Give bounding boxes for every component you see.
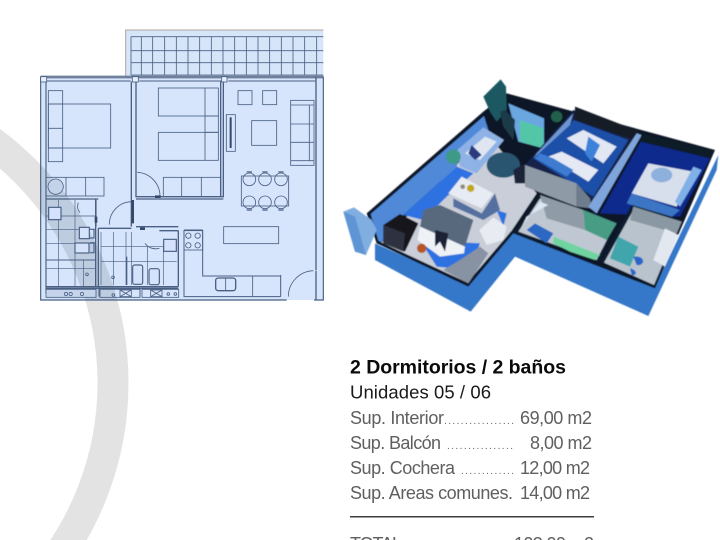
bedroom 2 furniture bbox=[137, 88, 221, 197]
dining table bbox=[241, 172, 289, 210]
divider rule bbox=[350, 516, 594, 518]
area list: ................. bbox=[444, 416, 514, 427]
sofa bbox=[457, 127, 504, 173]
bedroom block bbox=[525, 110, 635, 207]
dining table bbox=[448, 177, 493, 208]
floor slab bbox=[367, 93, 715, 288]
second bath bbox=[600, 205, 683, 287]
doors bbox=[78, 197, 313, 297]
heading: 2 Dormitorios / 2 baños bbox=[350, 356, 566, 378]
bedroom front wall bbox=[525, 165, 577, 207]
living floor bbox=[382, 133, 537, 283]
area list: Sup. Balcón bbox=[350, 433, 441, 453]
balcony bbox=[505, 93, 570, 148]
floor plan bbox=[41, 30, 323, 300]
units: Unidades 05 / 06 bbox=[350, 382, 491, 402]
bathroom 2 bbox=[101, 232, 177, 285]
area list: ................ bbox=[447, 441, 513, 452]
area list: 12,00 m2 bbox=[520, 458, 590, 478]
service strip bbox=[46, 289, 179, 297]
bathroom 1 bbox=[47, 200, 96, 287]
corridor and lower bath wall bbox=[513, 193, 618, 262]
twin beds bbox=[567, 130, 617, 163]
area list: 69,00 m2 bbox=[520, 408, 592, 428]
living room furniture bbox=[226, 91, 314, 165]
kitchen island bbox=[420, 205, 473, 247]
bedroom 1 furniture bbox=[46, 91, 111, 196]
interior walls bbox=[46, 82, 281, 297]
black fridge block bbox=[383, 214, 418, 252]
coffee table and rug bbox=[487, 152, 520, 178]
floor plan base fill bbox=[41, 30, 323, 300]
living wall bbox=[371, 116, 488, 243]
area list bbox=[350, 408, 592, 503]
balcony bbox=[126, 30, 323, 76]
floor blue patches bbox=[403, 167, 507, 270]
exterior walls bbox=[41, 77, 323, 300]
entry wall slab bbox=[343, 207, 377, 255]
area list: 8,00 m2 bbox=[530, 433, 592, 453]
counter block bbox=[479, 217, 507, 245]
area list: Sup. Cochera bbox=[350, 458, 456, 478]
kitchen bbox=[184, 227, 279, 296]
area list: Sup. Areas comunes. bbox=[350, 483, 513, 503]
master bedroom bbox=[600, 140, 710, 217]
grey arc background bbox=[0, 83, 113, 540]
exterior walls bbox=[375, 155, 718, 316]
3D floor plan render bbox=[343, 79, 718, 316]
partition wall bbox=[588, 133, 642, 213]
total row bbox=[350, 534, 594, 540]
area list: 14,00 m2 bbox=[520, 483, 590, 503]
area list: Sup. Interior bbox=[350, 408, 444, 428]
area list: ............. bbox=[461, 466, 514, 477]
